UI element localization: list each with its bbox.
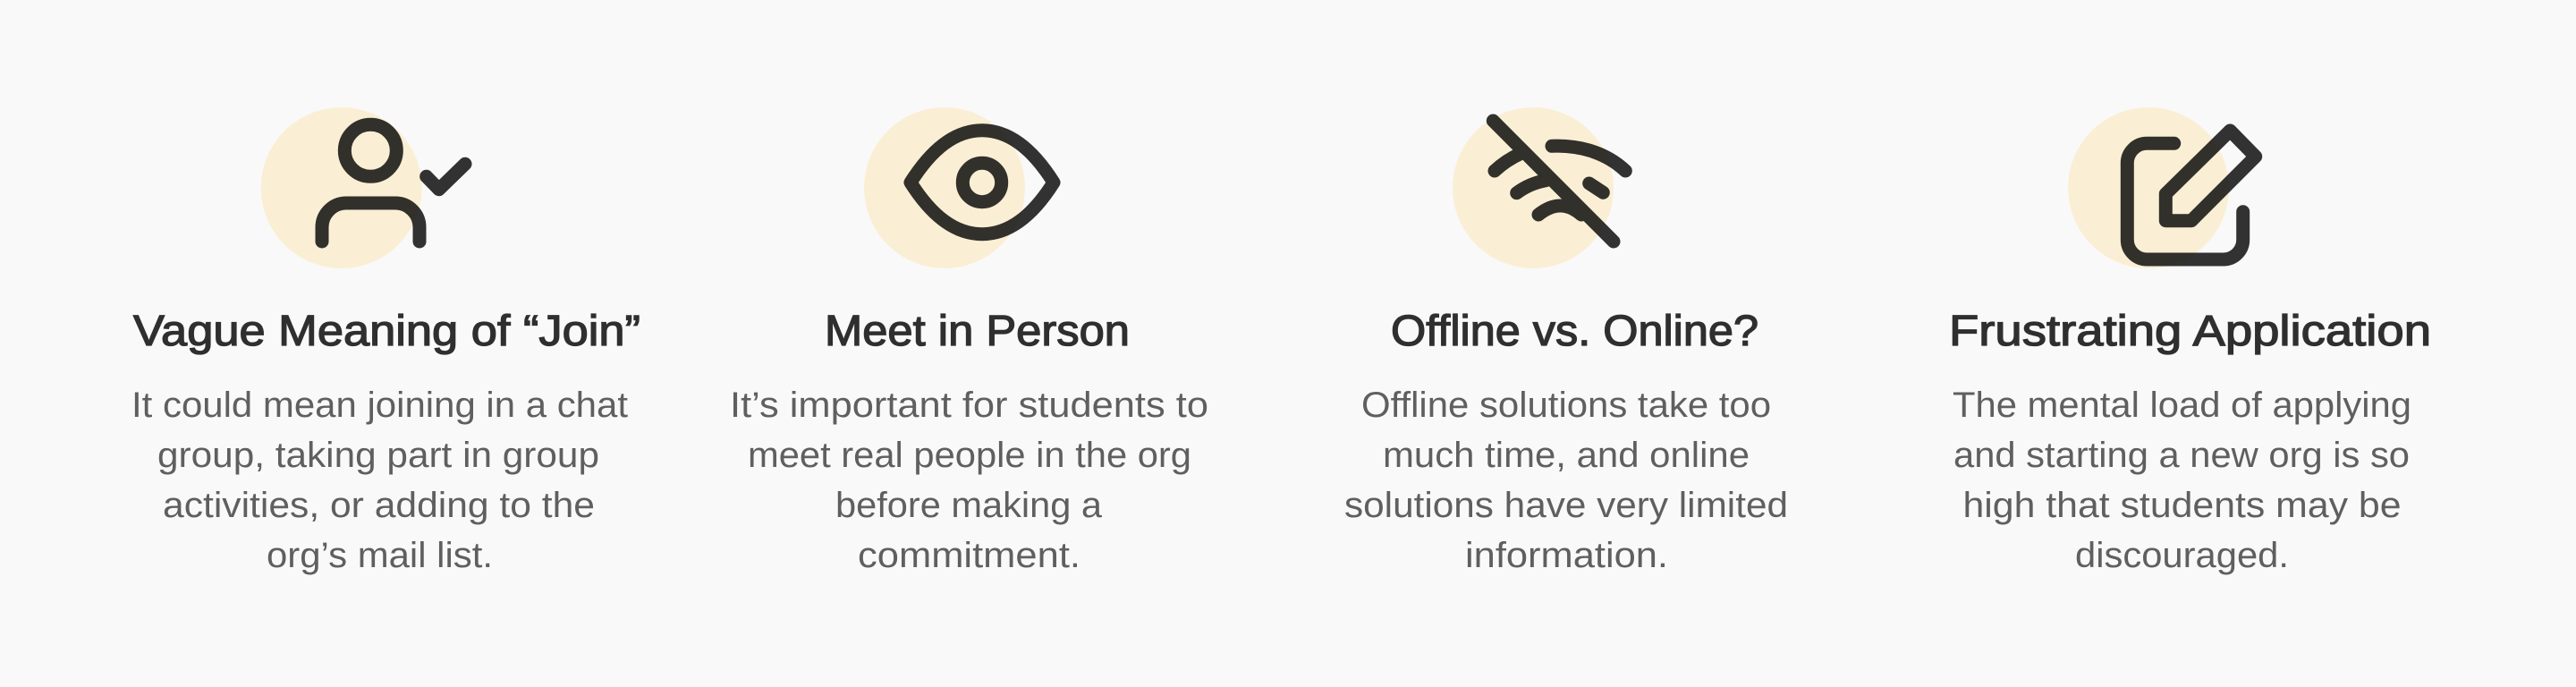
text block: meet in person description: before making a [835, 486, 1103, 525]
heading: vague meaning: Vague Meaning of “Join” [133, 308, 640, 355]
text block: frustrating application description: high that students may be [1962, 486, 2401, 525]
text block: vague meaning description: group, taking part in group [157, 436, 599, 475]
text block: vague meaning description: activities, or adding to the [163, 486, 595, 525]
text block: offline vs online description: solutions have very limited [1344, 486, 1788, 525]
text block: offline vs online description: Offline solutions take too [1361, 386, 1771, 425]
heading: frustrating application: Frustrating Application [1949, 308, 2431, 355]
text block: meet in person description: meet real people in the org [748, 436, 1191, 475]
text block: meet in person description: commitment. [858, 536, 1080, 575]
text block: vague meaning description: org’s mail list. [267, 536, 493, 575]
column: vague meaning of join [131, 107, 640, 575]
icon: eye [864, 107, 1054, 268]
heading: offline vs online: Offline vs. Online? [1391, 308, 1758, 355]
text block: frustrating application description: The mental load of applying [1953, 386, 2411, 425]
text block: frustrating application description: and starting a new org is so [1953, 436, 2410, 475]
column: frustrating application [1949, 107, 2431, 575]
column: meet in person [730, 107, 1208, 575]
text block: meet in person description [730, 386, 1208, 575]
text block: offline vs online description: information. [1465, 536, 1668, 575]
text block: vague meaning description [131, 386, 628, 575]
text block: meet in person description: It’s important for students to [730, 386, 1208, 425]
text block: offline vs online description: much time, and online [1383, 436, 1750, 475]
icon: pencil on document [2068, 107, 2256, 268]
column: offline vs online [1344, 107, 1788, 575]
icon: person with check mark [261, 107, 465, 268]
text block: vague meaning description: It could mean joining in a chat [131, 386, 628, 425]
heading: meet in person: Meet in Person [825, 308, 1130, 355]
text block: frustrating application description: discouraged. [2075, 536, 2289, 575]
text block: offline vs online description [1344, 386, 1788, 575]
icon: crossed-out wifi [1453, 107, 1625, 268]
text block: frustrating application description [1953, 386, 2411, 575]
